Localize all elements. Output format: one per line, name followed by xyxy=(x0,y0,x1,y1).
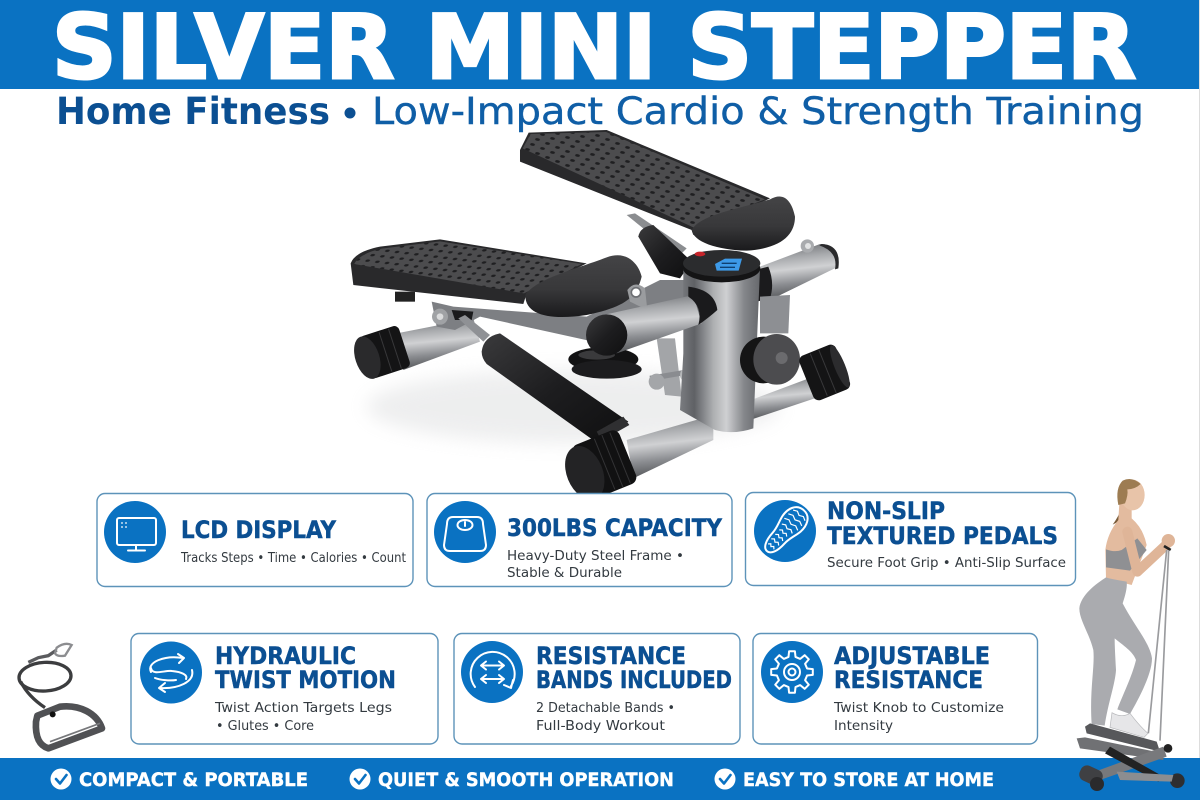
card text: Twist Action Targets Legs xyxy=(214,700,392,716)
icon: monitor xyxy=(104,501,166,563)
card text: Twist Knob to Customize xyxy=(833,700,1004,716)
card text: • Glutes • Core xyxy=(216,718,314,734)
centre column xyxy=(680,268,760,432)
benefit: quiet and smooth: QUIET & SMOOTH OPERATION xyxy=(378,769,674,791)
lower pedal xyxy=(351,239,642,317)
card heading xyxy=(215,642,396,694)
card heading: ADJUSTABLE xyxy=(834,642,990,670)
right foot cap xyxy=(797,342,854,402)
product image: mini stepper xyxy=(349,130,854,506)
card text xyxy=(833,700,1004,734)
icon: twist arrows xyxy=(140,642,202,704)
rear left foot tube and cap xyxy=(349,318,480,382)
icon: arrows in a circle xyxy=(461,641,523,703)
card text: 2 Detachable Bands • xyxy=(536,700,675,716)
upper body skin xyxy=(1105,503,1147,585)
rear cylinder xyxy=(627,213,687,257)
card heading: RESISTANCE xyxy=(834,666,983,694)
right rear arm tube xyxy=(755,239,839,333)
arm xyxy=(1127,532,1166,572)
card heading: 300LBS CAPACITY xyxy=(507,514,723,542)
card heading xyxy=(536,642,732,694)
card text: Intensity xyxy=(834,718,893,734)
feature card: LCD display xyxy=(97,494,413,586)
rotary knob xyxy=(740,334,800,385)
feature card: textured pedals xyxy=(746,492,1076,586)
display console xyxy=(683,250,760,282)
sports bra xyxy=(1106,538,1147,571)
front bottom tube xyxy=(627,415,713,478)
resistance band with handle xyxy=(18,644,102,748)
subtitle xyxy=(56,90,1144,133)
card text: Tracks Steps • Time • Calories • Count xyxy=(180,551,406,566)
black discs xyxy=(568,347,642,379)
upper pedal xyxy=(520,130,795,251)
card heading: TWIST MOTION xyxy=(215,666,396,694)
feature card: 300lbs capacity xyxy=(427,494,732,586)
card text: Stable & Durable xyxy=(507,565,622,581)
card text xyxy=(214,700,392,734)
card heading: RESISTANCE xyxy=(536,642,686,670)
card heading: HYDRAULIC xyxy=(215,642,356,670)
small stepper xyxy=(1077,723,1185,791)
left bolt bracket xyxy=(432,309,473,325)
ponytail xyxy=(1113,508,1125,525)
card heading: LCD DISPLAY xyxy=(181,516,337,544)
card heading xyxy=(834,642,990,694)
right edge line xyxy=(1199,0,1200,758)
icon: weighing scale xyxy=(434,501,496,563)
wrist strap xyxy=(1164,546,1171,550)
card text: Full-Body Workout xyxy=(536,718,665,734)
resistance band cords xyxy=(1148,550,1169,741)
footer banner xyxy=(0,758,1200,800)
shoe xyxy=(1110,713,1148,737)
lower pedal base plate xyxy=(432,280,687,342)
card heading: TEXTURED PEDALS xyxy=(827,522,1058,550)
card text: Secure Foot Grip • Anti-Slip Surface xyxy=(827,555,1066,571)
benefit: compact and portable: COMPACT & PORTABLE xyxy=(79,769,308,791)
icon: shoe sole xyxy=(754,500,816,562)
long hydraulic cylinder xyxy=(458,315,629,443)
front foot cap xyxy=(557,428,639,506)
card text: Heavy-Duty Steel Frame • xyxy=(507,548,684,564)
subtitle: Low-Impact Cardio & Strength Training xyxy=(372,90,1144,133)
hand xyxy=(1162,534,1175,547)
feature card: adjustable resistance xyxy=(753,634,1038,744)
centre bracket with bolts xyxy=(649,338,693,397)
card heading: NON-SLIP xyxy=(827,497,945,525)
front arm tube with ball end xyxy=(586,287,717,356)
card text xyxy=(507,548,684,581)
icon: gear xyxy=(761,641,823,703)
head and hair xyxy=(1117,479,1145,510)
subtitle: Home Fitness xyxy=(56,90,330,133)
leggings xyxy=(1079,577,1152,726)
card text xyxy=(536,700,675,734)
small lug xyxy=(627,285,647,310)
right bottom tube xyxy=(747,377,820,420)
benefit: easy to store: EASY TO STORE AT HOME xyxy=(743,769,994,791)
feature card: hydraulic twist xyxy=(131,634,438,744)
card heading xyxy=(827,497,1058,550)
header banner xyxy=(0,0,1200,99)
card heading: BANDS INCLUDED xyxy=(536,666,732,694)
woman exercising on stepper xyxy=(1077,479,1185,791)
feature card: resistance bands xyxy=(454,634,740,744)
